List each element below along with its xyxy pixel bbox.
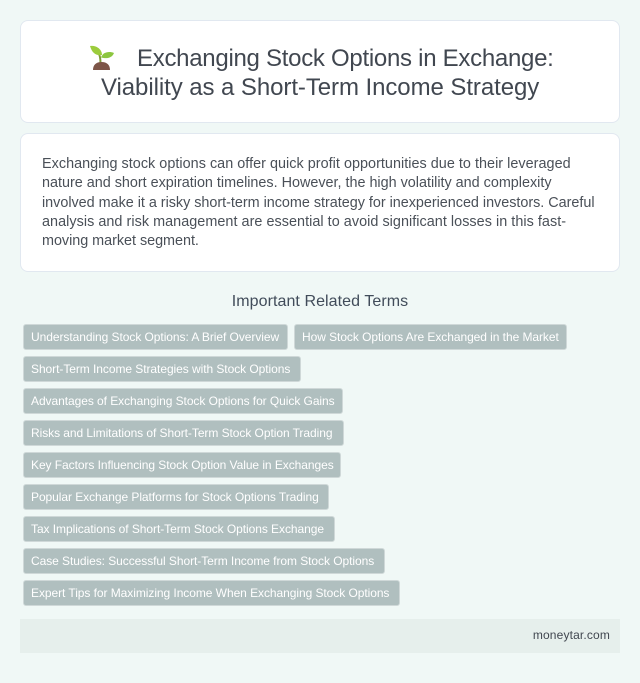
icon: seedling <box>90 46 114 70</box>
tag list: Risks and Limitations of Short-Term Stock Option Trading <box>31 426 332 440</box>
title: Exchanging Stock Options in Exchange: <box>137 45 554 72</box>
tag list: Advantages of Exchanging Stock Options for Quick Gains <box>31 394 335 408</box>
tag list: How Stock Options Are Exchanged in the Market <box>302 330 559 344</box>
panel: title card <box>20 20 620 123</box>
footer: source <box>20 619 620 653</box>
tag list: Case Studies: Successful Short-Term Income from Stock Options <box>31 554 374 568</box>
summary text: involved make it a risky short-term income strategy for inexperienced investors. Careful <box>42 195 594 211</box>
tag list: Key Factors Influencing Stock Option Value in Exchanges <box>31 458 334 472</box>
summary text: Exchanging stock options can offer quick profit opportunities due to their leveraged <box>42 156 571 172</box>
panel: summary card <box>20 133 620 272</box>
heading: important related terms: Important Related Terms <box>232 293 408 310</box>
tag list <box>23 324 567 606</box>
tag list: Expert Tips for Maximizing Income When Exchanging Stock Options <box>31 586 389 600</box>
summary text <box>42 156 594 249</box>
summary text: analysis and risk management are essential to avoid significant losses in this fast- <box>42 214 566 230</box>
summary text: nature and short expiration timelines. However, the high volatility and complexity <box>42 175 552 191</box>
tag list: Short-Term Income Strategies with Stock Options <box>31 362 290 376</box>
tag list: Tax Implications of Short-Term Stock Options Exchange <box>31 522 324 536</box>
tag list: Understanding Stock Options: A Brief Overview <box>31 330 279 344</box>
title <box>101 45 554 101</box>
title: Viability as a Short-Term Income Strategy <box>101 74 539 101</box>
tag list: Popular Exchange Platforms for Stock Options Trading <box>31 490 319 504</box>
footer: source: moneytar.com <box>533 628 610 642</box>
summary text: moving market segment. <box>42 233 199 249</box>
